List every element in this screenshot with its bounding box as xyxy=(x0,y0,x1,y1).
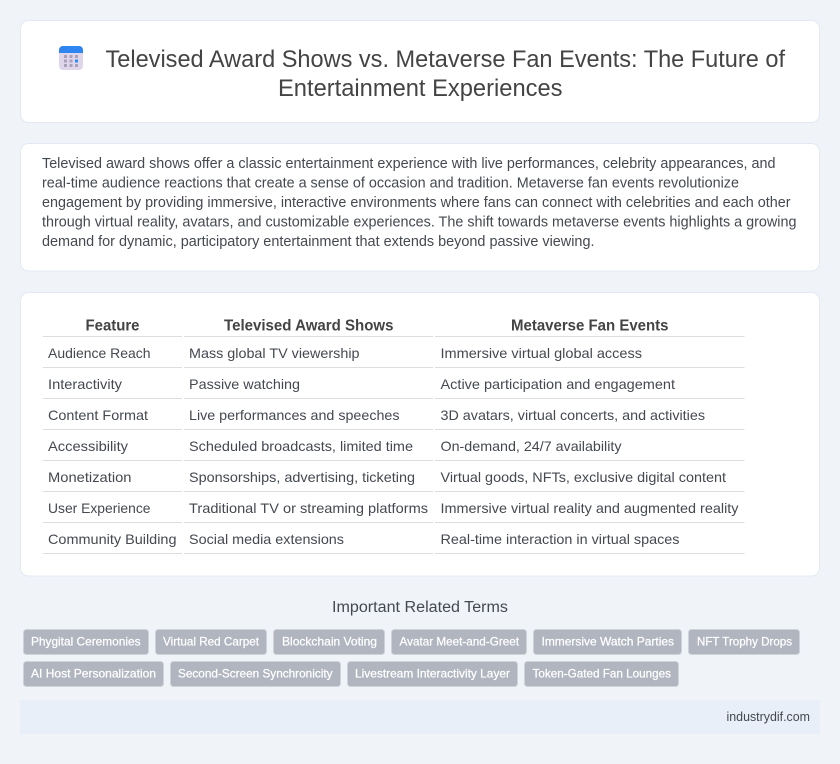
table header row: Metaverse Fan Events xyxy=(511,318,668,334)
footer xyxy=(20,700,820,734)
table row: user experience xyxy=(48,500,738,516)
tag list: related terms: Livestream Interactivity Layer xyxy=(355,666,510,680)
table row: monetization: Virtual goods, NFTs, exclusive digital content xyxy=(440,469,726,485)
table row: accessibility: Scheduled broadcasts, limited time xyxy=(189,438,413,454)
tag list: related terms: Avatar Meet-and-Greet xyxy=(400,634,520,648)
table row: accessibility xyxy=(48,438,622,454)
tag list: related terms: Virtual Red Carpet xyxy=(163,634,260,648)
tag list: related terms: Second-Screen Synchronicity xyxy=(178,666,332,680)
table header row: Feature xyxy=(86,318,140,334)
table row: interactivity: Interactivity xyxy=(48,376,122,392)
tag list: related terms: AI Host Personalization xyxy=(31,666,156,680)
tag list: related terms: Token-Gated Fan Lounges xyxy=(532,666,671,680)
text block: introduction paragraph: engagement by providing immersive, interactive environments where fans can connect with celebrities and each other xyxy=(42,195,791,211)
table header row: Televised Award Shows xyxy=(224,318,394,334)
tag list: related terms: Phygital Ceremonies xyxy=(31,634,140,648)
table row: content format xyxy=(48,407,705,423)
table row: audience reach xyxy=(48,345,642,361)
table row: audience reach: Immersive virtual global access xyxy=(440,345,642,361)
tag list: related terms: Blockchain Voting xyxy=(282,634,377,648)
table header row xyxy=(86,318,668,334)
icon: calendar xyxy=(59,46,83,70)
table row: user experience: User Experience xyxy=(48,500,151,516)
footer source text: industrydif.com xyxy=(726,710,810,724)
table row: user experience: Immersive virtual reality and augmented reality xyxy=(440,500,738,516)
table row: accessibility: Accessibility xyxy=(48,438,128,454)
table row: content format: Live performances and speeches xyxy=(189,407,400,423)
tag list: related terms xyxy=(24,630,800,686)
table row: interactivity xyxy=(48,376,675,392)
table row: accessibility: On-demand, 24/7 availability xyxy=(440,438,622,454)
table row: monetization: Sponsorships, advertising, ticketing xyxy=(189,469,415,485)
panel: introduction xyxy=(20,144,820,271)
table row: community building: Community Building xyxy=(48,531,176,547)
table row: community building: Real-time interaction in virtual spaces xyxy=(440,531,680,547)
heading: important related terms: Important Related Terms xyxy=(332,599,508,616)
table row: audience reach: Audience Reach xyxy=(48,345,150,361)
text block: introduction paragraph: through virtual reality, avatars, and customizable experiences. The shift towards metaverse events highlights a growing xyxy=(42,214,796,230)
table row: monetization xyxy=(48,469,726,485)
text block: introduction paragraph: real-time audience reactions that create a sense of occasion and tradition. Metaverse fan events revolutionize xyxy=(42,176,739,192)
text block: introduction paragraph xyxy=(42,156,796,250)
table row: interactivity: Passive watching xyxy=(189,376,300,392)
table row: content format: Content Format xyxy=(48,407,148,423)
text block: introduction paragraph: Televised award shows offer a classic entertainment experience with live performances, celebrity appearances, and xyxy=(42,156,776,172)
panel: title header xyxy=(20,20,820,122)
table row: content format: 3D avatars, virtual concerts, and activities xyxy=(440,407,705,423)
table row: interactivity: Active participation and engagement xyxy=(440,376,675,392)
table row: monetization: Monetization xyxy=(48,469,132,485)
title xyxy=(106,46,785,102)
title: Televised Award Shows vs. Metaverse Fan Events: The Future of xyxy=(106,46,785,73)
table row: community building: Social media extensions xyxy=(189,531,344,547)
table row: user experience: Traditional TV or streaming platforms xyxy=(189,500,428,516)
text block: introduction paragraph: demand for dynamic, participatory entertainment that extends beyond passive viewing. xyxy=(42,234,594,250)
tag list: related terms: NFT Trophy Drops xyxy=(697,634,792,648)
table row: community building xyxy=(48,531,680,547)
tag list: related terms: Immersive Watch Parties xyxy=(542,634,674,648)
panel: comparison table xyxy=(20,292,820,576)
title: Entertainment Experiences xyxy=(278,75,562,102)
table row: audience reach: Mass global TV viewership xyxy=(189,345,360,361)
